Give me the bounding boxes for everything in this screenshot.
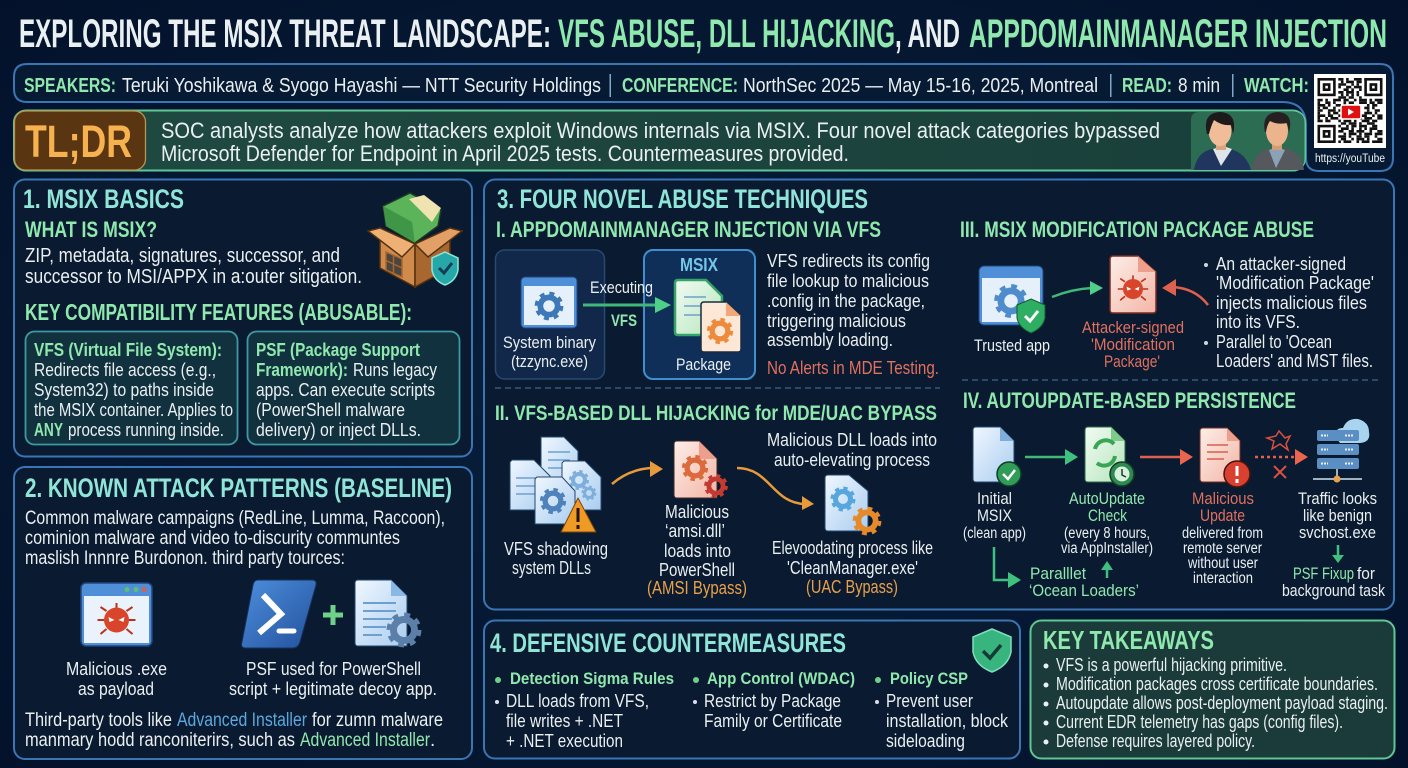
heading: MSIX basics: 1. MSIX BASICS (23, 184, 184, 214)
caption: malicious exe: as payload (78, 679, 154, 699)
panel: key takeaways (1030, 620, 1394, 758)
card: VFS: the MSIX container. Applies to (34, 400, 233, 420)
caption: malicious update: remote server (1183, 540, 1262, 557)
description III bullets: Loaders' and MST files. (1216, 351, 1373, 371)
caption: auto-elevating process (767, 430, 937, 470)
heading: four novel abuse techniques: 3. FOUR NOVEL ABUSE TECHNIQUES (497, 184, 868, 214)
header bar: speakers, conference, read time, watch: READ: (1122, 75, 1172, 97)
icon: plus (323, 605, 343, 625)
caption: amsi.dll: ‘amsi.dll’ (665, 521, 725, 541)
description III bullets (1204, 254, 1374, 371)
description III bullets: injects malicious files (1216, 293, 1367, 313)
description I: VFS redirects its config (767, 251, 930, 271)
caption: PSF fixup (1282, 564, 1385, 600)
caption: parallel Ocean Loaders: ‘Ocean Loaders’ (1029, 581, 1139, 600)
icon: server with cloud (1313, 419, 1369, 482)
arrow: green into package (1052, 281, 1103, 297)
caption: CleanManager (772, 538, 933, 597)
panel 3: four novel abuse techniques (484, 180, 1394, 610)
technique I: AppDomainManager injection (496, 217, 939, 379)
takeaways list: Defense requires layered policy. (1056, 731, 1255, 751)
card: VFS: System32) to paths inside (34, 380, 214, 400)
caption: amsi.dll: (AMSI Bypass) (647, 578, 747, 598)
arrow: orange curve one (612, 461, 663, 484)
subheading: key compatibility features: KEY COMPATIBILITY FEATURES (ABUSABLE): (25, 299, 412, 325)
caption: malicious update: interaction (1193, 570, 1253, 587)
arrow: up to autoupdate (1101, 561, 1113, 578)
caption: autoupdate check: AutoUpdate (1069, 489, 1145, 508)
caption: auto-elevating process: Malicious DLL loads into (767, 430, 937, 450)
card: PSF (248, 332, 460, 444)
description III bullets: An attacker-signed (1216, 254, 1346, 274)
heading: defensive countermeasures: 4. DEFENSIVE COUNTERMEASURES (490, 628, 846, 658)
arrow: executing via VFS: VFS (611, 311, 637, 330)
takeaways list (1044, 655, 1388, 751)
caption: traffic looks benign: svchost.exe (1299, 523, 1376, 542)
caption: amsi.dll: loads into (664, 541, 731, 561)
subheading: what is MSIX: WHAT IS MSIX? (25, 217, 157, 242)
card: PSF: (PowerShell malware (256, 400, 405, 420)
TL;DR summary text: Microsoft Defender for Endpoint in April 2025 tests. Countermeasures provided. (161, 141, 849, 166)
arrow: down to PSF fixup (1332, 545, 1344, 563)
caption: VFS shadowing: system DLLs (512, 558, 591, 578)
MSIX description: successor to MSI/APPX in a:outer sitigation. (25, 265, 362, 288)
column: detection sigma rules: + .NET execution (506, 731, 623, 751)
caption: amsi.dll (647, 502, 747, 598)
caption: malicious update: without user (1187, 555, 1258, 572)
arrow: executing via VFS (583, 278, 671, 330)
technique III: modification package abuse (960, 217, 1374, 371)
column: detection sigma rules (495, 669, 674, 751)
TL;DR badge: TL;DR (25, 116, 132, 167)
MSIX description: ZIP, metadata, signatures, successor, and (25, 244, 340, 267)
icon: trusted app: Trusted app (974, 336, 1050, 355)
TL;DR summary text: SOC analysts analyze how attackers exploit Windows internals via MSIX. Four novel attack categories bypassed (161, 118, 1160, 143)
MSIX package box: Package (676, 355, 731, 374)
icon: initial clean MSIX (973, 427, 1021, 486)
description I: file lookup to malicious (767, 271, 929, 291)
caption: parallel Ocean Loaders: Paralllet (1030, 564, 1086, 583)
caption: PSF powershell: PSF used for PowerShell (246, 659, 421, 679)
third-party tools note: Advanced Installer (177, 710, 308, 731)
caption: auto-elevating process: auto-elevating process (774, 450, 930, 470)
caption: autoupdate check: Check (1088, 506, 1127, 525)
icon: shadowed DLL documents with warning (510, 437, 601, 532)
column: policy CSP: sideloading (886, 731, 965, 751)
header bar: speakers, conference, read time, watch: WATCH: (1244, 75, 1309, 97)
subheading IV: IV. AUTOUPDATE-BASED PERSISTENCE (963, 388, 1296, 413)
caption: initial MSIX: MSIX (977, 506, 1012, 525)
intro text (25, 508, 445, 569)
column: app control: Family or Certificate (704, 711, 842, 731)
caption: malicious update: Update (1200, 506, 1245, 525)
caption: malicious exe: Malicious .exe (66, 659, 167, 679)
arrow: red into package (1162, 279, 1208, 305)
header bar: speakers, conference, read time, watch: CONFERENCE: (622, 75, 738, 97)
icon: autoupdate check (1085, 427, 1134, 486)
caption: PSF fixup: PSF Fixup (1293, 564, 1354, 583)
card: PSF: Framework): (256, 360, 348, 380)
intro text: cominion malware and video to-discurity communtes (25, 528, 400, 549)
QR code (1314, 74, 1386, 165)
caption: traffic looks benign: like benign (1303, 506, 1372, 525)
system binary box: (tzzync.exe) (511, 352, 588, 371)
caption: PSF fixup: for (1357, 564, 1375, 583)
caption: autoupdate check (1061, 489, 1153, 557)
column: policy CSP: Policy CSP (890, 669, 968, 688)
icon: shield (973, 629, 1011, 672)
caption: parallel Ocean Loaders (1029, 564, 1139, 600)
caption: initial MSIX: (clean app) (963, 525, 1026, 542)
third-party tools note: . (430, 730, 435, 751)
panel 4: defensive countermeasures (484, 620, 1020, 758)
caption: PSF powershell: script + legitimate decoy app. (229, 679, 437, 699)
third-party tools note: Advanced Installer (300, 730, 431, 751)
description I: assembly loading. (767, 330, 893, 350)
card: PSF: delivery) or inject DLLs. (256, 420, 421, 440)
column: detection sigma rules: file writes + .NET (506, 711, 623, 731)
column: detection sigma rules: DLL loads from VFS, (506, 691, 649, 711)
arrow: to autoupdate (1025, 449, 1078, 465)
caption: amsi.dll: PowerShell (659, 560, 735, 580)
icon: elevating process document (825, 475, 879, 533)
card: VFS: process running inside. (68, 420, 224, 440)
caption: attacker-signed package (1082, 318, 1184, 371)
description III bullets: Parallel to 'Ocean (1216, 332, 1332, 352)
arrow: executing via VFS: Executing (590, 278, 653, 297)
caption: attacker-signed package: Attacker-signed (1082, 318, 1184, 337)
header bar: speakers, conference, read time, watch: 8 min (1178, 75, 1220, 97)
caption: malicious update: Malicious (1192, 489, 1254, 508)
caption: autoupdate check: via AppInstaller) (1061, 540, 1153, 557)
caption: PSF fixup: background task (1282, 581, 1385, 600)
arrow: L-shaped to Ocean Loaders (994, 547, 1021, 588)
description I: triggering malicious (767, 311, 906, 331)
title: EXPLORING THE MSIX THREAT LANDSCAPE: (19, 12, 551, 56)
system binary box: System binary (503, 333, 596, 352)
heading: known attack patterns: 2. KNOWN ATTACK PATTERNS (BASELINE) (25, 473, 452, 503)
icon: malicious update (1200, 428, 1250, 487)
caption: traffic looks benign (1298, 489, 1377, 542)
intro text: maslish Innnre Burdonon. third party tources: (25, 548, 345, 569)
title: VFS ABUSE, DLL HIJACKING (558, 12, 895, 56)
icon: open package box with shield (368, 193, 462, 287)
caption: malicious update (1182, 489, 1263, 587)
caption: attacker-signed package: 'Modification (1091, 335, 1175, 354)
MSIX package box (644, 250, 755, 379)
caption: CleanManager: 'CleanManager.exe' (787, 558, 918, 578)
technique IV: autoupdate persistence (963, 388, 1385, 600)
column: app control: Restrict by Package (704, 691, 841, 711)
icon: trusted app (974, 266, 1050, 355)
header bar: speakers, conference, read time, watch (14, 64, 1393, 171)
QR code: https://youTube (1315, 153, 1385, 165)
caption: CleanManager: Elevoodating process like (772, 538, 933, 558)
header bar: speakers, conference, read time, watch: Teruki Yoshikawa & Syogo Hayashi — NTT Security Holdings (122, 75, 601, 97)
column: app control: App Control (WDAC) (707, 669, 855, 688)
MSIX package box: MSIX (680, 255, 718, 275)
description III bullets: into its VFS. (1216, 312, 1300, 332)
description I: No Alerts in MDE Testing. (767, 358, 939, 378)
TL;DR summary text (161, 118, 1160, 166)
subheading II: II. VFS-BASED DLL HIJACKING for MDE/UAC BYPASS (495, 401, 937, 425)
third-party tools note: Third-party tools like (25, 710, 172, 731)
subheading I: I. APPDOMAINMANAGER INJECTION VIA VFS (496, 217, 881, 242)
technique II: VFS-based DLL hijacking (495, 401, 937, 598)
title: , AND (895, 12, 960, 56)
icon: PowerShell (242, 580, 316, 648)
third-party tools note: for zumn malware (312, 710, 443, 731)
third-party tools note (25, 710, 443, 751)
caption: malicious update: delivered from (1182, 525, 1263, 542)
MSIX description (25, 244, 362, 288)
arrow: dotted traffic with star and scissors (1255, 431, 1308, 478)
card: VFS: ANY (34, 420, 63, 440)
heading: key takeaways: KEY TAKEAWAYS (1043, 625, 1214, 655)
header bar: speakers, conference, read time, watch: SPEAKERS: (24, 75, 116, 97)
caption: VFS shadowing (504, 539, 608, 578)
caption: malicious exe (66, 659, 167, 699)
panel 2: known attack patterns (14, 467, 472, 759)
description I (767, 251, 939, 378)
caption: amsi.dll: Malicious (665, 502, 729, 522)
caption: initial MSIX: Initial (977, 489, 1012, 508)
card: VFS: Redirects file access (e.g., (34, 360, 216, 380)
description III bullets: 'Modification Package' (1216, 273, 1374, 293)
column: policy CSP: Prevent user (886, 691, 973, 711)
panel 1: MSIX basics (14, 180, 472, 456)
column: policy CSP (875, 669, 1009, 751)
card: VFS (26, 332, 238, 444)
TL;DR banner (14, 110, 1305, 170)
intro text: Common malware campaigns (RedLine, Lumma, Raccoon), (25, 508, 445, 529)
caption: CleanManager: (UAC Bypass) (806, 577, 898, 597)
arrow: to malicious update (1140, 449, 1193, 465)
title (19, 12, 1387, 56)
caption: PSF powershell (229, 659, 437, 699)
icon: malicious exe window (81, 583, 152, 646)
description I: .config in the package, (767, 291, 925, 311)
system binary box (496, 250, 604, 379)
caption: initial MSIX (963, 489, 1026, 542)
caption: VFS shadowing: VFS shadowing (504, 539, 608, 559)
caption: autoupdate check: (every 8 hours, (1064, 525, 1150, 542)
icon: malicious modification package (1110, 256, 1156, 313)
column: policy CSP: installation, block (886, 711, 1009, 731)
card: PSF: PSF (Package Support (256, 340, 420, 360)
card: PSF: apps. Can execute scripts (256, 380, 435, 400)
icon: document with gear (355, 580, 419, 646)
column: detection sigma rules: Detection Sigma Rules (510, 669, 674, 688)
card: VFS: VFS (Virtual File System): (34, 340, 222, 360)
header bar: speakers, conference, read time, watch: NorthSec 2025 — May 15-16, 2025, Montreal (743, 75, 1098, 97)
third-party tools note: manmary hodd ranconiterirs, such as (25, 730, 295, 751)
caption: attacker-signed package: Package' (1104, 352, 1160, 371)
arrow: orange curve two (737, 468, 814, 510)
subheading III: III. MSIX MODIFICATION PACKAGE ABUSE (960, 217, 1314, 242)
icon: malicious amsi.dll (674, 441, 726, 498)
caption: traffic looks benign: Traffic looks (1298, 489, 1377, 508)
column: app control (693, 669, 855, 731)
card: PSF: Runs legacy (353, 360, 437, 380)
speaker portraits (1191, 112, 1304, 170)
takeaways list: VFS is a powerful hijacking primitive. (1056, 655, 1287, 675)
